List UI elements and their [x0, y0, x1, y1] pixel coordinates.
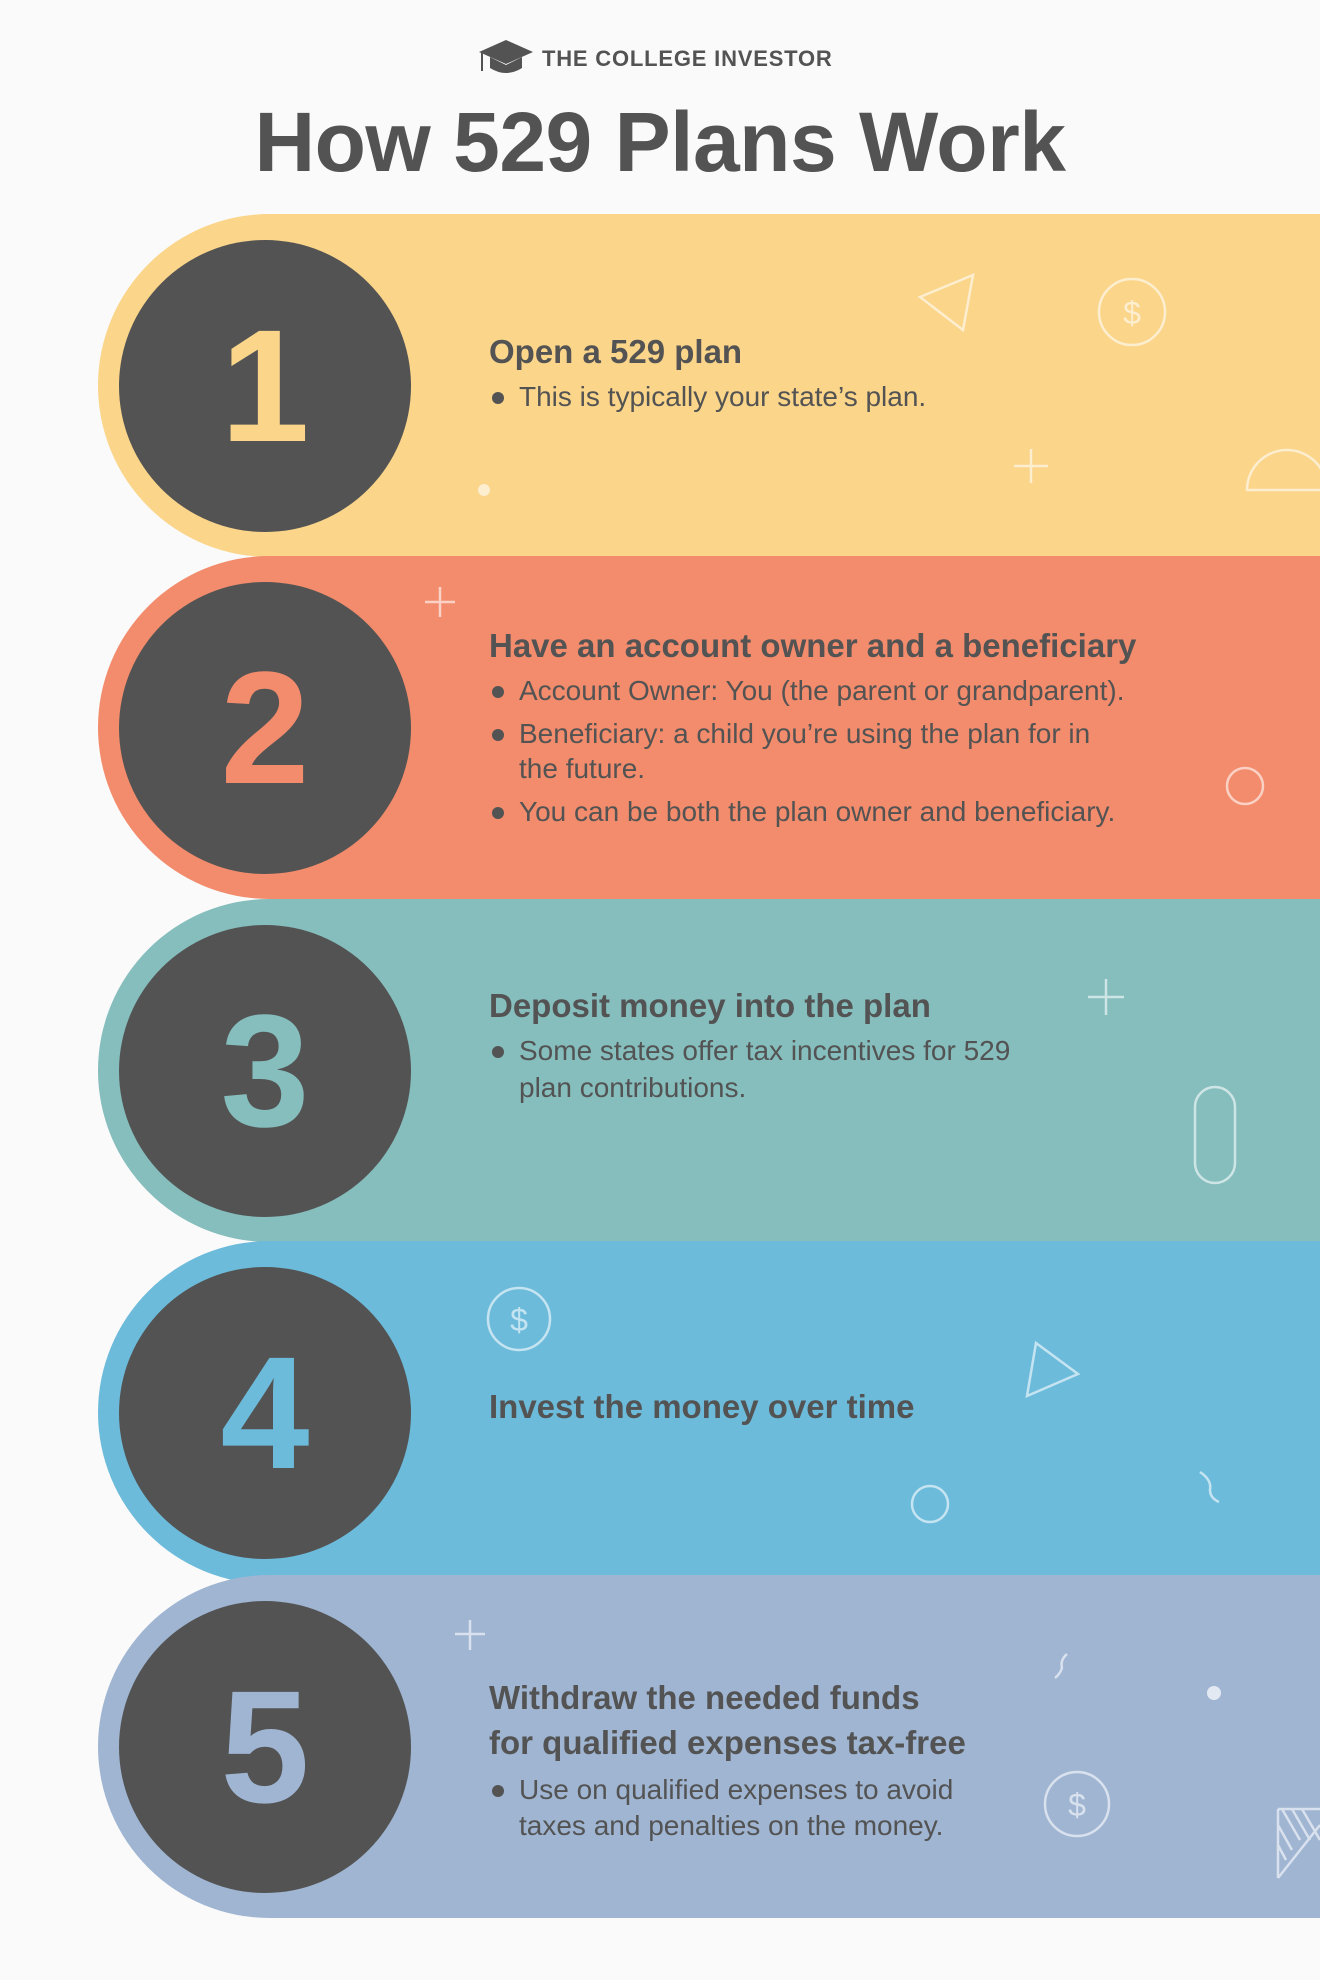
bullet 3: plan contributions.: [519, 1072, 746, 1103]
logo: [479, 40, 833, 73]
decorations: $: [1123, 295, 1141, 331]
bullet 5: Use on qualified expenses to avoid: [519, 1774, 953, 1805]
number 5: [119, 1601, 411, 1893]
bullet 5: [492, 1774, 953, 1841]
bullet 1: This is typically your state’s plan.: [519, 381, 926, 412]
icon: graduation cap: [479, 40, 533, 73]
number 3: [119, 925, 411, 1217]
number 3: 3: [220, 981, 309, 1160]
number 1: [119, 240, 411, 532]
bullets 2: Beneficiary: a child you’re using the plan for in: [519, 718, 1090, 749]
bullet 3: [492, 1035, 1010, 1103]
bullet 5: taxes and penalties on the money.: [519, 1810, 943, 1841]
number 2: [119, 582, 411, 874]
panel: step 2: [98, 556, 1320, 899]
heading 3: Deposit money into the plan: [489, 987, 931, 1024]
heading 5: Withdraw the needed funds: [489, 1679, 920, 1716]
bullets 2: Account Owner: You (the parent or grandparent).: [519, 675, 1124, 706]
bullets 2: You can be both the plan owner and beneficiary.: [519, 796, 1115, 827]
decorations: $: [510, 1302, 528, 1338]
bullets 2: [492, 675, 1124, 827]
panel: step 3: [98, 899, 1320, 1242]
bullets 2: the future.: [519, 753, 645, 784]
number 4: 4: [220, 1323, 309, 1502]
bullet 3: Some states offer tax incentives for 529: [519, 1035, 1010, 1066]
heading 4: Invest the money over time: [489, 1388, 914, 1425]
panel: step 1: [98, 214, 1320, 557]
heading 1: Open a 529 plan: [489, 333, 742, 370]
logo text: THE COLLEGE INVESTOR: [542, 46, 833, 71]
panel: step 4: [98, 1241, 1320, 1584]
heading 5: for qualified expenses tax-free: [489, 1724, 966, 1761]
heading 5: [489, 1679, 966, 1761]
number 1: 1: [220, 296, 309, 475]
decorations: $: [1068, 1787, 1086, 1823]
number 5: 5: [220, 1657, 309, 1836]
number 2: 2: [220, 638, 309, 817]
title: How 529 Plans Work: [254, 95, 1066, 189]
number 4: [119, 1267, 411, 1559]
panel: step 5: [98, 1575, 1320, 1918]
heading 2: Have an account owner and a beneficiary: [489, 627, 1136, 664]
